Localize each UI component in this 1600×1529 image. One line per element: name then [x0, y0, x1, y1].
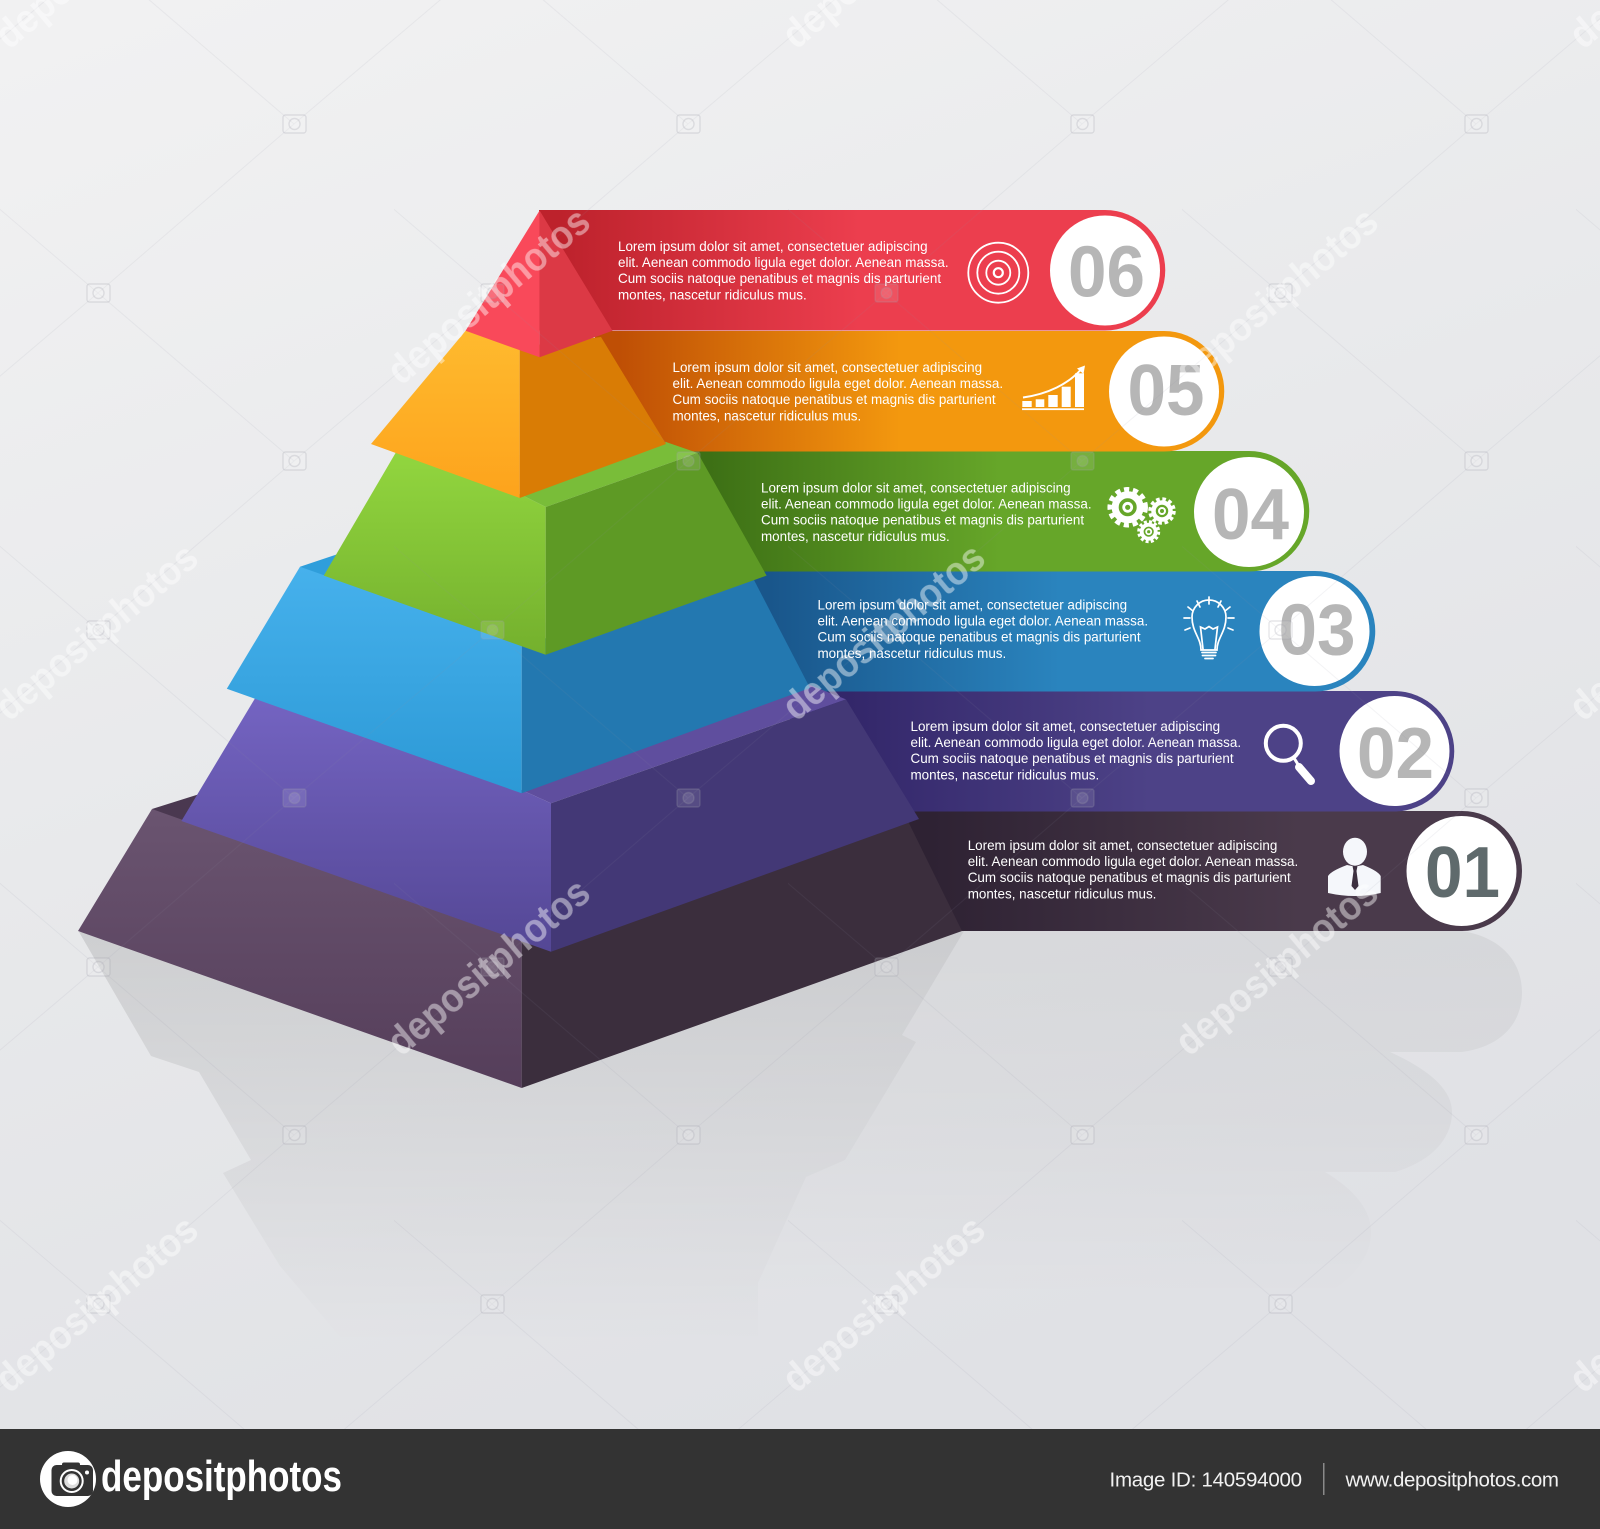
- number 03: 03: [1278, 590, 1356, 670]
- ribbon 05: [595, 331, 1224, 452]
- text 05: elit. Aenean commodo ligula eget dolor. Aenean massa.: [672, 376, 1003, 391]
- icon: target: [968, 243, 1028, 303]
- ribbon 04: [690, 451, 1309, 572]
- watermark overlay: depositphotos: [379, 870, 599, 1064]
- pyramid tier 4: green: [324, 442, 767, 655]
- number 04: 04: [1212, 475, 1289, 555]
- text 01: Lorem ipsum dolor sit amet, consectetuer adipiscing: [968, 838, 1277, 853]
- text 03: Cum sociis natoque penatibus et magnis dis parturient: [818, 630, 1141, 645]
- text 06: Cum sociis natoque penatibus et magnis dis parturient: [618, 271, 941, 286]
- text 06: elit. Aenean commodo ligula eget dolor. Aenean massa.: [618, 255, 949, 270]
- pyramid tier 3: blue: [227, 554, 810, 793]
- text 04: montes, nascetur ridiculus mus.: [761, 529, 950, 544]
- icon: businessman: [1328, 838, 1381, 896]
- divider: [1323, 1463, 1324, 1495]
- text 02: montes, nascetur ridiculus mus.: [910, 767, 1099, 782]
- text 03: montes, nascetur ridiculus mus.: [818, 646, 1006, 661]
- text 02: Cum sociis natoque penatibus et magnis dis parturient: [910, 751, 1234, 766]
- text 03: Lorem ipsum dolor sit amet, consectetuer adipiscing: [818, 598, 1127, 612]
- pyramid tier 1: dark plum: [78, 794, 962, 1088]
- text 04: elit. Aenean commodo ligula eget dolor. Aenean massa.: [761, 497, 1092, 512]
- watermark overlay: depositphotos: [1167, 870, 1387, 1064]
- icon: gears: [1110, 489, 1174, 542]
- footer logo icon: [40, 1451, 96, 1507]
- pyramid tier 6: red: [466, 210, 612, 357]
- text 06: Lorem ipsum dolor sit amet, consectetuer adipiscing: [618, 239, 928, 254]
- footer bar: [0, 1429, 1600, 1529]
- ribbon 01: [900, 811, 1522, 931]
- watermark overlay: depositphotos: [1167, 199, 1387, 393]
- number 06: 06: [1068, 232, 1145, 312]
- text 02: elit. Aenean commodo ligula eget dolor. Aenean massa.: [910, 735, 1241, 750]
- ribbon reflection: [758, 931, 1522, 1300]
- icon: light bulb: [1184, 597, 1234, 658]
- number 02: 02: [1357, 714, 1434, 794]
- ribbon 02: [790, 691, 1454, 812]
- text 03: elit. Aenean commodo ligula eget dolor. Aenean massa.: [818, 614, 1148, 629]
- image id: Image ID: 140594000: [1110, 1468, 1302, 1492]
- watermark overlay: depositphotos: [379, 199, 599, 393]
- text 04: Lorem ipsum dolor sit amet, consectetuer adipiscing: [761, 480, 1071, 496]
- icon: magnifying glass: [1266, 726, 1311, 781]
- text 05: montes, nascetur ridiculus mus.: [672, 408, 861, 423]
- text 01: Cum sociis natoque penatibus et magnis dis parturient: [968, 870, 1291, 885]
- footer logo wordmark: depositphotos: [101, 1452, 342, 1501]
- website: www.depositphotos.com: [1344, 1468, 1559, 1492]
- text 05: Lorem ipsum dolor sit amet, consectetuer adipiscing: [672, 360, 982, 375]
- ribbon 06: [539, 210, 1165, 330]
- text 06: montes, nascetur ridiculus mus.: [618, 287, 807, 302]
- text 01: montes, nascetur ridiculus mus.: [968, 886, 1156, 901]
- pyramid reflection: [79, 931, 964, 1345]
- text 05: Cum sociis natoque penatibus et magnis dis parturient: [672, 392, 996, 407]
- text 02: Lorem ipsum dolor sit amet, consectetuer adipiscing: [910, 719, 1220, 734]
- pyramid tier 2: purple: [181, 685, 919, 952]
- watermark overlay: depositphotos: [774, 535, 994, 729]
- text 01: elit. Aenean commodo ligula eget dolor. Aenean massa.: [968, 854, 1298, 869]
- ribbon 03: [750, 571, 1375, 692]
- icon: growth chart: [1022, 366, 1085, 410]
- watermark overlay: depositphotos: [774, 1207, 994, 1401]
- text 04: Cum sociis natoque penatibus et magnis dis parturient: [761, 513, 1084, 528]
- number 05: 05: [1128, 351, 1204, 431]
- pyramid tier 5: orange: [371, 316, 666, 498]
- number 01: 01: [1425, 833, 1500, 913]
